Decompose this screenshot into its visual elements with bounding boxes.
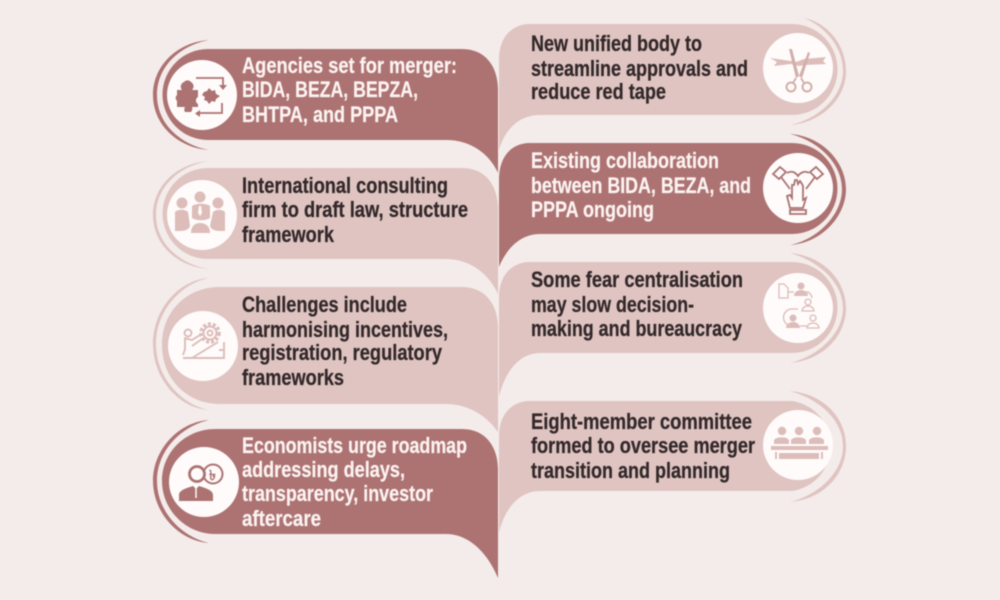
text: existing collaboration [531,148,751,222]
text: centralisation fear: making and bureaucracy [531,316,743,341]
panel: eight-member committee [499,391,846,533]
panel: international consulting firm [153,161,498,294]
text: agencies: BHTPA, and PPPA [242,102,398,127]
panel: existing collaboration [499,134,846,267]
panel: new unified body [499,18,846,150]
panel: agencies set for merger [153,40,498,173]
icon: committee at a table [771,427,828,459]
icon: businessman with currency coin [179,464,222,501]
text: agencies [242,53,457,127]
text: centralisation fear [531,267,743,341]
text: challenges: harmonising incentives, [242,317,448,342]
text: consulting firm [242,173,468,247]
text: challenges: registration, regulatory [242,340,443,365]
icon: decision flow with people [779,282,819,328]
text: economists [242,433,467,531]
text: new unified body: reduce red tape [531,79,666,104]
panel: economists urge roadmap [153,420,498,578]
panel: challenges [153,278,498,432]
text: economists: Economists urge roadmap [242,433,467,458]
text: economists: aftercare [242,506,321,531]
text: agencies: BIDA, BEZA, BEPZA, [242,77,418,102]
text: existing collaboration: Existing collaboration [531,148,719,173]
icon: person pushing gear uphill [183,324,224,358]
panel: centralisation fear [499,253,846,397]
text: consulting firm: framework [242,222,335,247]
text: committee: formed to oversee merger [531,433,755,458]
text: committee: Eight-member committee [531,409,752,434]
text: consulting firm: firm to draft law, structure [242,197,468,222]
text: challenges [242,292,448,390]
text: committee: transition and planning [531,458,730,483]
icon: three people at a table [175,192,225,233]
text: new unified body [531,31,748,104]
text: committee [531,409,755,483]
text: centralisation fear: may slow decision- [531,292,694,317]
icon: scissors cutting ribbon [770,49,826,92]
text: challenges: frameworks [242,365,344,390]
text: new unified body: streamline approvals and [531,56,748,81]
text: challenges: Challenges include [242,292,407,317]
text: centralisation fear: Some fear centralisation [531,267,743,292]
text: new unified body: New unified body to [531,31,702,56]
icon: businessman with currency coin: ৳ [209,467,216,483]
text: economists: transparency, investor [242,481,433,506]
icon: puzzle pieces and arrows [176,78,227,117]
text: consulting firm: International consulting [242,173,448,198]
text: economists: addressing delays, [242,457,405,482]
text: existing collaboration: PPPA ongoing [531,197,654,222]
text: existing collaboration: between BIDA, BEZA, and [531,173,751,198]
icon: three joined hands [773,167,823,214]
text: agencies: Agencies set for merger: [242,53,457,78]
